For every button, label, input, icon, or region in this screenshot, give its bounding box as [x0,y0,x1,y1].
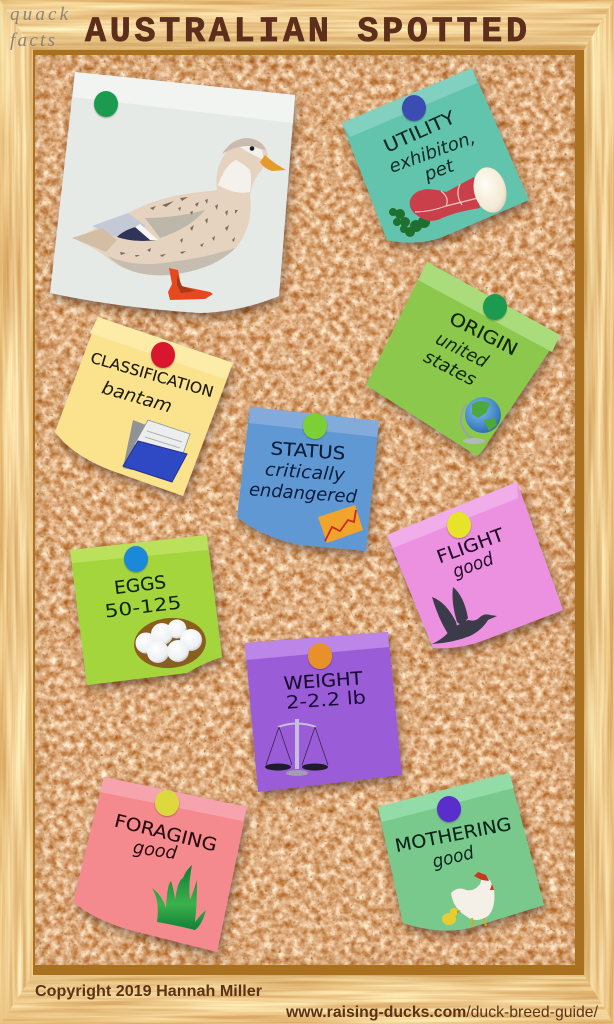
panel: weight note [245,632,402,792]
value: critically [264,459,346,486]
panel: duck illustration note [50,72,295,313]
quack facts logo [10,4,69,51]
heading: FLIGHT [434,524,508,568]
icon: meat and egg [389,164,511,237]
pin [437,796,461,822]
value: 2-2.2 lb [285,687,367,714]
quack facts logo: facts [10,30,55,51]
icon: scales [265,719,328,776]
value: exhibiton, [386,127,478,178]
panel: eggs note [70,535,222,685]
value: states [420,346,479,391]
pin [308,643,332,669]
pin [124,546,148,572]
source url: www.raising-ducks.com/duck-breed-guide/ [285,1004,599,1021]
icon: hen and chick [442,872,494,927]
title: AUSTRALIAN SPOTTED [85,12,527,52]
panel: status note [237,407,379,551]
icon: folder [123,420,190,482]
panel: utility note [342,68,529,243]
copyright: Copyright 2019 Hannah Miller [35,983,262,1000]
icon: chart [318,505,363,543]
heading: MOTHERING [393,814,513,857]
heading: FORAGING [112,811,219,856]
heading: WEIGHT [283,668,364,695]
pin [447,512,471,538]
heading: STATUS [270,438,346,465]
value: good [430,842,477,873]
icon: flying duck [432,587,497,644]
icon: nest of eggs [132,615,208,671]
panel: classification note [55,317,233,496]
panel: foraging note [73,777,247,952]
value: endangered [248,479,358,508]
pin [402,95,426,121]
icon: duck [72,138,286,300]
value: bantam [99,377,174,417]
value: 50-125 [104,592,183,623]
icon: globe [461,397,501,444]
heading: EGGS [113,572,167,599]
panel: flight note [387,482,563,648]
pin [303,413,327,439]
quack facts logo: quack [10,4,69,25]
value: united [432,328,492,373]
pin [155,790,179,816]
heading: ORIGIN [446,308,521,360]
pin [94,91,118,117]
icon: grass [152,865,206,930]
value: good [450,548,497,583]
value: good [132,837,179,864]
value: pet [421,155,458,186]
pin [151,342,175,368]
pin [483,294,507,320]
heading: UTILITY [381,107,460,157]
panel: mothering note [378,773,544,931]
heading: CLASSIFICATION [88,349,216,401]
panel: origin note [366,262,560,456]
